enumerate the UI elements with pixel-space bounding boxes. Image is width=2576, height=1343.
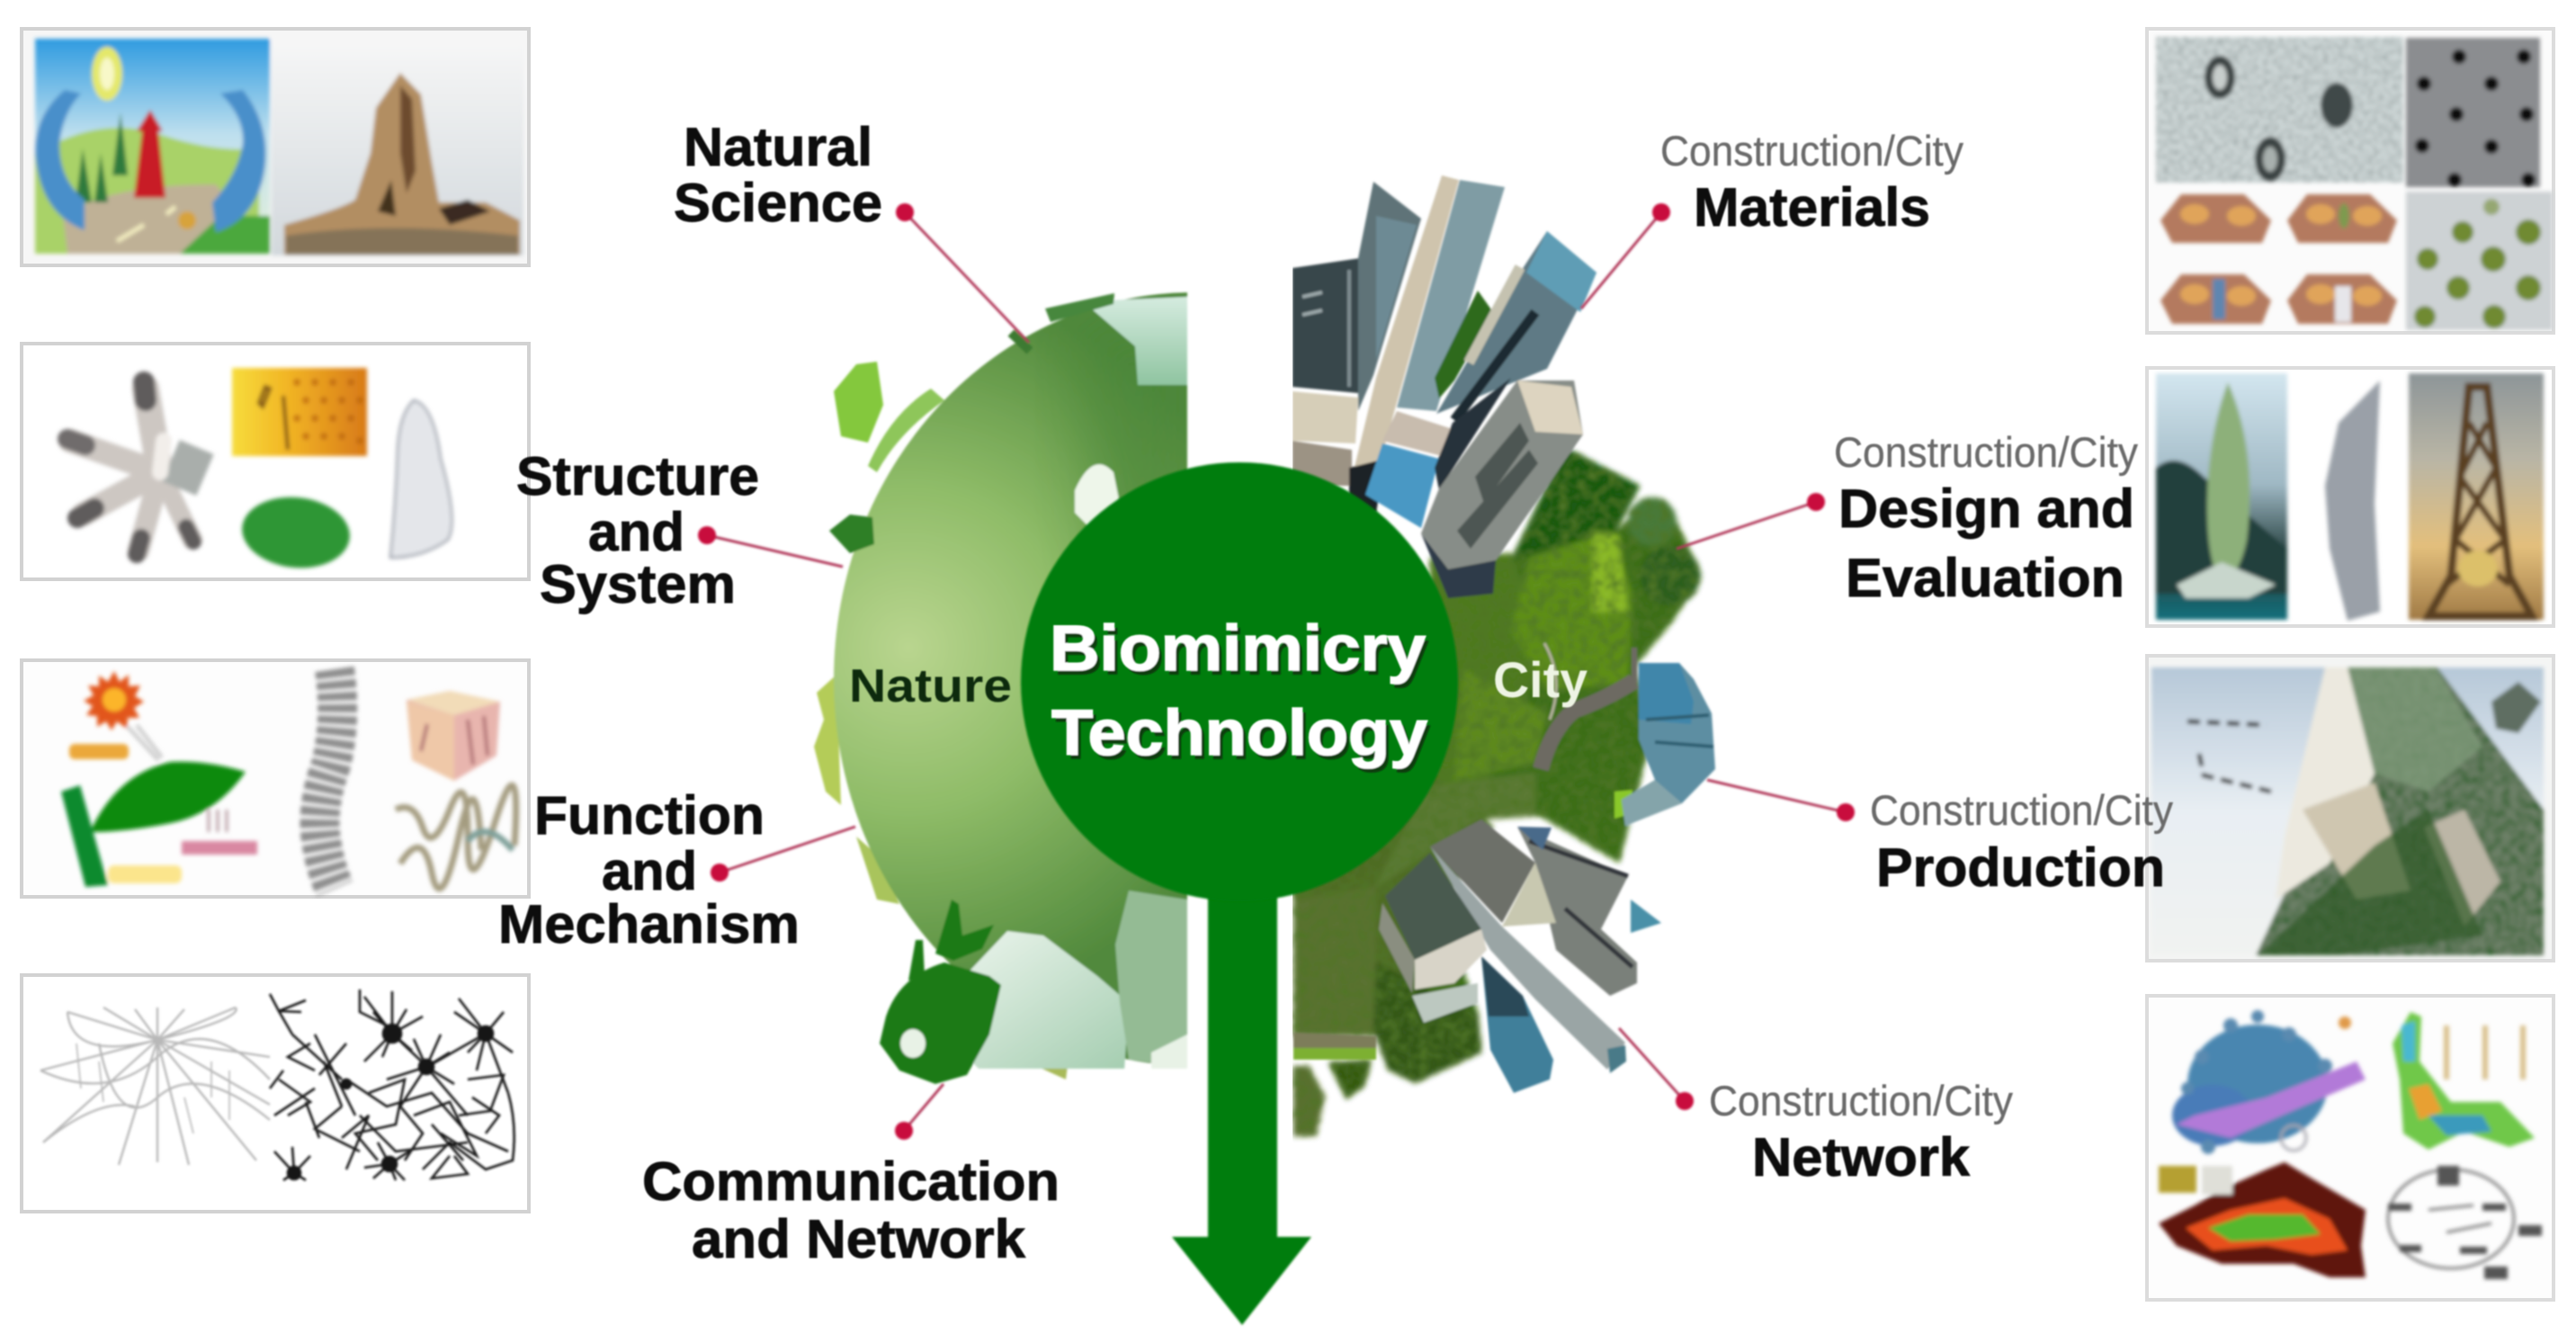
image: skin block xyxy=(407,691,500,781)
panel: material surfaces xyxy=(2147,29,2554,333)
image: lattice tower xyxy=(2409,373,2544,620)
label: Construction/City Production xyxy=(1870,786,2173,898)
label: Communication and Network: Communication xyxy=(642,1151,1060,1212)
title: Biomimicry Technology: Technology xyxy=(1055,703,1432,774)
image: lawn bands xyxy=(1293,1033,1376,1050)
panel: water cycle and termite mound xyxy=(22,29,529,265)
connector lines xyxy=(707,212,1846,1131)
image: road xyxy=(1541,643,1634,769)
label: Construction/City Materials: Materials xyxy=(1694,177,1930,237)
label: Function and Mechanism: Function xyxy=(534,785,765,846)
image: moss dots surface xyxy=(2406,192,2553,330)
label: Natural Science: Natural xyxy=(684,117,872,177)
image: tree xyxy=(834,362,883,443)
label: Construction/City Design and Evaluation: Evaluation xyxy=(1846,548,2124,608)
image: relief map xyxy=(2159,1162,2366,1277)
image: planet greenery xyxy=(1293,447,1702,1136)
label: Construction/City Materials: Construction/City xyxy=(1660,127,1963,175)
image: spider web xyxy=(40,1007,270,1165)
image: cluster network xyxy=(2172,1010,2366,1154)
image: lower towers xyxy=(1379,819,1661,1093)
label: City: City xyxy=(1493,651,1588,708)
image: labels and leaf xyxy=(61,744,257,887)
title: Biomimicry Technology: Biomimicry xyxy=(1050,613,1427,685)
panel: spider web and neuron network xyxy=(22,975,529,1212)
title: Biomimicry Technology: Biomimicry xyxy=(1053,618,1430,689)
image: drone chain xyxy=(2187,721,2271,792)
arrow: downward xyxy=(1172,891,1311,1325)
panel: nature half globe xyxy=(812,291,1189,1086)
image: upper towers xyxy=(1292,175,1597,598)
image: insect wing xyxy=(390,400,452,558)
panel: biomimetic tower designs xyxy=(2147,368,2554,626)
label: Communication and Network xyxy=(642,1151,1060,1269)
image: DNA strand xyxy=(396,785,516,889)
image: green globe xyxy=(832,291,1189,1070)
image: hanging module xyxy=(2491,682,2541,733)
image: elephant and giraffes xyxy=(880,900,1001,1084)
image: green building xyxy=(2256,667,2544,955)
label: Construction/City Production: Construction/City xyxy=(1870,786,2173,834)
image: neuron network xyxy=(270,989,514,1180)
label: Construction/City Network: Construction/City xyxy=(1709,1077,2013,1124)
label: Construction/City Design and Evaluation xyxy=(1834,428,2138,608)
label: Function and Mechanism: and xyxy=(602,841,697,901)
label: Communication and Network: and Network xyxy=(692,1209,1026,1269)
label: Structure and System: and xyxy=(588,502,684,562)
label: Construction/City Network xyxy=(1709,1077,2013,1187)
image: ecosystem cycle xyxy=(35,39,270,254)
image: gecko foot xyxy=(67,382,205,554)
marker dots xyxy=(698,203,1855,1140)
image: green leaf xyxy=(238,492,353,573)
image: right towers xyxy=(1622,663,1715,826)
image: top ridge xyxy=(1045,293,1114,322)
image: honeycomb xyxy=(232,368,367,456)
image: heat map xyxy=(2393,1012,2535,1150)
label: Structure and System xyxy=(516,446,759,614)
panel: network maps xyxy=(2147,996,2554,1300)
image: twisted tower xyxy=(2325,381,2380,621)
label: Construction/City Network: Network xyxy=(1752,1127,1971,1187)
label: Natural Science: Science xyxy=(674,173,882,233)
panel: green facade building xyxy=(2147,656,2554,961)
image: process diagram xyxy=(2388,1166,2542,1279)
label: Structure and System: Structure xyxy=(516,446,759,506)
label: Nature: Nature xyxy=(849,660,1012,712)
title: Biomimicry Technology xyxy=(1050,613,1432,774)
label: Construction/City Materials xyxy=(1660,127,1963,237)
label: Construction/City Design and Evaluation: Design and xyxy=(1838,479,2134,539)
image: perforated grey surface xyxy=(2406,38,2540,187)
image: leaf tower xyxy=(2156,373,2287,620)
image: termite mound xyxy=(272,36,523,255)
label: Function and Mechanism xyxy=(498,785,800,954)
image: sun xyxy=(84,671,162,760)
panel: leaf, spine, skin and DNA xyxy=(22,660,529,897)
image: water droplets xyxy=(2156,37,2403,183)
image: grass fringe xyxy=(814,389,1070,1079)
image: hexagonal blocks xyxy=(2160,194,2397,324)
label: Structure and System: System xyxy=(540,554,736,614)
label: Construction/City Production: Production xyxy=(1876,837,2165,898)
label: Construction/City Design and Evaluation: Construction/City xyxy=(1834,428,2138,476)
label: Natural Science xyxy=(674,117,882,233)
central circle xyxy=(1021,462,1458,901)
image: small turtle xyxy=(829,515,874,553)
panel: gecko foot, honeycomb, leaf and wing xyxy=(22,344,529,579)
panel: city half planet xyxy=(1292,175,1715,1136)
label: Function and Mechanism: Mechanism xyxy=(498,894,800,954)
image: spine xyxy=(320,669,337,889)
title: Biomimicry Technology: Technology xyxy=(1051,698,1428,769)
